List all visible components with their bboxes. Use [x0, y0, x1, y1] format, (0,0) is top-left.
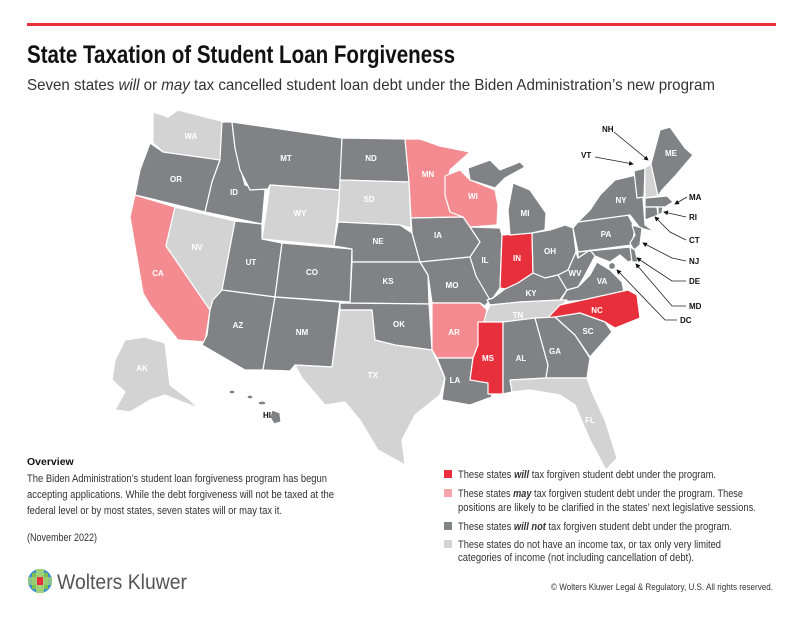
state labels: WA — [185, 132, 198, 141]
top red bar — [27, 23, 776, 26]
state: VT — [634, 168, 645, 198]
state: MD — [578, 247, 633, 262]
state: NY — [578, 175, 655, 232]
state labels: VA — [597, 277, 607, 286]
state labels: SD — [363, 195, 375, 204]
state labels: NM — [296, 328, 309, 337]
state labels: IN — [513, 254, 521, 263]
state: LA — [437, 358, 492, 405]
DC marker — [608, 262, 616, 270]
state labels: OK — [393, 320, 405, 329]
state: HI — [229, 390, 281, 424]
state: WV — [558, 250, 595, 290]
state: KY — [487, 273, 567, 305]
state: CT — [645, 207, 658, 220]
state labels: AL — [516, 354, 526, 363]
overview paragraph: federal level or by most states, seven states will or may tax it. — [27, 505, 282, 517]
state: OR — [135, 143, 220, 212]
callouts: small states: VT — [581, 151, 591, 160]
state: NM — [263, 297, 340, 371]
state: WY — [262, 185, 340, 246]
state: MN — [405, 139, 470, 218]
callouts: small states: DC — [680, 316, 692, 325]
state: AL — [503, 318, 548, 394]
state labels: CO — [306, 268, 318, 277]
callouts: small states: MD — [689, 302, 702, 311]
state: NC — [543, 290, 640, 328]
state labels: MS — [482, 354, 495, 363]
state: GA — [535, 317, 590, 378]
state: AZ — [202, 290, 275, 370]
state: FL — [510, 378, 617, 470]
subtitle: Seven states will or may tax cancelled student loan debt under the Biden Administration’s new program — [27, 77, 715, 94]
overview paragraph — [27, 473, 334, 544]
state: UT — [222, 221, 282, 297]
callouts: small states — [263, 125, 702, 420]
state labels: NE — [372, 237, 384, 246]
state labels: AZ — [233, 321, 243, 330]
state: TX — [295, 310, 445, 465]
state labels: OH — [544, 247, 556, 256]
state labels: TN — [513, 311, 524, 320]
state labels: IA — [434, 231, 442, 240]
state labels: KS — [382, 277, 394, 286]
state labels: SC — [582, 327, 594, 336]
state labels: FL — [585, 416, 595, 425]
state: OK — [340, 303, 432, 350]
state labels: NY — [615, 196, 627, 205]
state labels: UT — [246, 258, 256, 267]
legend: categories of income (not including cancellation of debt). — [458, 552, 694, 564]
state labels: NC — [591, 306, 603, 315]
state: TN — [482, 300, 567, 322]
state: MS — [470, 322, 503, 394]
legend: These states may tax forgiven student debt under the program. These — [458, 488, 743, 500]
legend: These states will tax forgiven student debt under the program. — [458, 469, 716, 481]
state: MI lower — [508, 183, 546, 235]
state: RI — [658, 207, 663, 215]
state: IN — [500, 233, 533, 289]
state labels: KY — [525, 289, 537, 298]
state labels: MT — [280, 154, 292, 163]
state: AK — [112, 337, 198, 412]
state: MI upper — [468, 160, 525, 188]
callouts: small states: RI — [689, 213, 697, 222]
logo: Wolters Kluwer: Wolters Kluwer — [57, 571, 187, 594]
state labels: NV — [191, 243, 203, 252]
state labels: ND — [365, 154, 377, 163]
callouts: small states: CT — [689, 236, 700, 245]
overview paragraph: The Biden Administration’s student loan forgiveness program has begun — [27, 473, 327, 485]
state labels: CA — [152, 269, 164, 278]
state: NH — [645, 164, 658, 198]
overview paragraph: (November 2022) — [27, 532, 97, 544]
overview paragraph: accepting applications. While the debt forgiveness will not be taxed at the — [27, 489, 334, 501]
state labels: AK — [136, 364, 148, 373]
callouts: small states: NH — [602, 125, 614, 134]
state: IL — [470, 227, 502, 300]
state: WI — [445, 170, 498, 227]
state: CO — [275, 243, 352, 302]
state: SD — [338, 180, 411, 228]
callouts: small states: DE — [689, 277, 701, 286]
callouts: small states: HI — [263, 411, 271, 420]
state labels — [136, 132, 678, 425]
state labels: MN — [422, 170, 434, 179]
state: DE — [630, 247, 638, 262]
state: MO — [420, 257, 490, 306]
state labels: WY — [294, 209, 307, 218]
state labels: LA — [450, 376, 461, 385]
state: ID — [205, 122, 265, 224]
state labels: MO — [446, 281, 458, 290]
state labels: WI — [468, 192, 478, 201]
state labels: OR — [170, 175, 182, 184]
state: SC — [555, 313, 612, 357]
state: MA — [645, 196, 673, 207]
state: IA — [411, 217, 480, 262]
state labels: PA — [601, 230, 611, 239]
legend: These states will not tax forgiven student debt under the program. — [458, 521, 732, 533]
state: NE — [334, 222, 420, 262]
state: OH — [532, 225, 576, 278]
title: State Taxation of Student Loan Forgiveness — [27, 41, 455, 69]
state labels: GA — [549, 347, 561, 356]
state labels: TX — [368, 371, 379, 380]
state labels: ME — [665, 149, 678, 158]
state labels: MI — [521, 209, 529, 218]
state labels: ID — [230, 188, 238, 197]
map — [112, 110, 693, 470]
state: AR — [432, 303, 487, 358]
state: KS — [350, 262, 429, 304]
state: WA — [153, 110, 225, 160]
callouts: small states: MA — [689, 193, 702, 202]
legend: These states do not have an income tax, or tax only very limited — [458, 539, 721, 551]
state labels: WV — [569, 269, 582, 278]
state: VA — [560, 262, 625, 302]
state: NV — [166, 207, 235, 310]
state labels: AR — [448, 328, 460, 337]
state: PA — [573, 215, 635, 252]
state: NJ — [630, 225, 642, 250]
state: CA — [130, 195, 210, 342]
callouts: small states: NJ — [689, 257, 699, 266]
legend: positions are likely to be clarified in the states’ next legislative sessions. — [458, 502, 756, 514]
state: ME — [651, 127, 693, 196]
legend — [444, 469, 756, 564]
state labels: IL — [481, 256, 489, 265]
overview heading: Overview — [27, 456, 75, 468]
state: MT — [232, 122, 342, 190]
state: ND — [340, 138, 409, 182]
